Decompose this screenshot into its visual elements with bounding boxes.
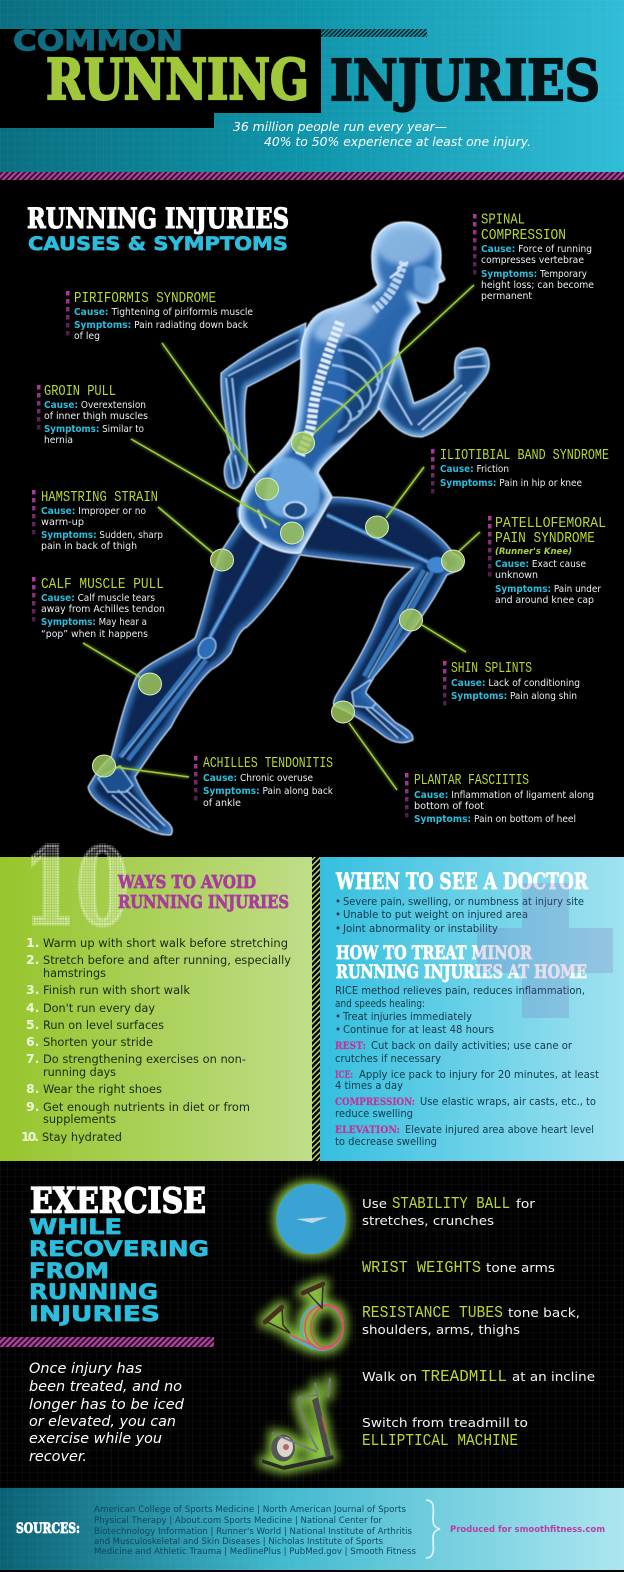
rear arm — [221, 323, 306, 489]
callout: plantar fasciitis: bottom of foot — [414, 801, 484, 812]
callout: hamstring strain: pain in back of thigh — [41, 541, 137, 552]
rear leg — [88, 500, 320, 835]
callout: spinal compression: SPINAL — [481, 212, 525, 228]
brace — [426, 1500, 440, 1558]
list of ten tips: Warm up with short walk before stretching — [43, 937, 288, 950]
RICE instructions: Treat injuries immediately — [342, 1012, 472, 1023]
doctor bullet list: Joint abnormality or instability — [342, 924, 498, 935]
text: elliptical machine: Switch from treadmill to — [362, 1415, 528, 1430]
list of ten tips: Do strengthening exercises on non- — [43, 1053, 246, 1066]
RICE instructions: ICE: — [335, 1070, 353, 1081]
paragraph: once injury has been treated: Once injury has — [29, 1361, 142, 1377]
heading: exercise: EXERCISE — [30, 1180, 206, 1222]
callout: patellofemoral pain syndrome: PAIN SYNDROME — [495, 531, 595, 547]
callout: plantar fasciitis: Symptoms: Pain on bottom of heel — [414, 814, 576, 825]
panel: ten ways to avoid running injuries — [0, 824, 312, 1161]
shoulder light — [310, 300, 380, 346]
text: wrist weights — [362, 1258, 555, 1277]
list of ten tips: 8. — [26, 1081, 39, 1096]
callout: patellofemoral pain syndrome: (Runner's Knee) — [495, 547, 572, 557]
RICE instructions: RICE method relieves pain, reduces inflammation, — [335, 986, 585, 997]
doctor bullet list — [335, 897, 584, 935]
source list: and Musculoskeletal and Skin Diseases | Nicholas Institute of Sports — [94, 1537, 384, 1547]
callout: shin splints: Cause: Lack of conditioning — [451, 678, 580, 689]
text: resistance tubes: shoulders, arms, thighs — [362, 1322, 520, 1337]
callout: groin pull: hernia — [44, 435, 73, 446]
subtitle — [233, 119, 531, 149]
text: elliptical machine — [362, 1415, 528, 1450]
heading: how to treat: HOW TO TREAT MINOR — [336, 943, 532, 964]
heading: running injuries causes and symptoms — [27, 202, 289, 255]
heading: while recovering from running injuries: FROM — [29, 1259, 109, 1284]
callout: plantar fasciitis: Cause: Inflammation of ligament along — [414, 790, 594, 801]
text: treadmill: at an incline — [512, 1369, 595, 1384]
callout: calf muscle pull: Symptoms: May hear a — [41, 617, 147, 628]
callout: spinal compression: permanent — [481, 291, 532, 302]
doctor bullet list: • — [335, 910, 341, 921]
list of ten tips: Wear the right shoes — [43, 1083, 162, 1096]
black title block — [0, 29, 321, 128]
callout: hamstring strain: Cause: Improper or no — [41, 506, 146, 517]
callout: hamstring strain: Symptoms: Sudden, sharp — [41, 530, 163, 541]
list of ten tips: Don't run every day — [43, 1002, 155, 1015]
text: stability ball: stretches, crunches — [362, 1213, 494, 1228]
list of ten tips: Finish run with short walk — [43, 984, 191, 997]
pointer lines to injury sites — [83, 285, 480, 790]
heading: ways to avoid: WAYS TO AVOID — [117, 872, 256, 893]
spine — [300, 322, 340, 455]
dark rib cavity — [330, 335, 380, 445]
heading: how to treat — [336, 943, 587, 983]
list of ten tips: 9. — [26, 1099, 39, 1114]
callout: piriformis syndrome: of leg — [74, 331, 100, 342]
list of ten tips: 4. — [26, 1000, 39, 1015]
label: sources: SOURCES: — [16, 1521, 80, 1537]
RICE instructions: crutches if necessary — [335, 1054, 441, 1065]
title: RUNNING: RUNNING — [46, 47, 309, 113]
RICE instructions: reduce swelling — [335, 1109, 413, 1120]
callout: shin splints: SHIN SPLINTS — [451, 661, 532, 677]
doctor bullet list: Unable to put weight on injured area — [343, 910, 528, 921]
panel: exercise while recovering — [0, 1161, 624, 1488]
produced by credit: Produced for smoothfitness.com — [450, 1525, 605, 1535]
text: resistance tubes — [362, 1303, 580, 1337]
text: treadmill: Walk on — [362, 1369, 417, 1384]
paragraph: once injury has been treated: or elevated, you can — [29, 1414, 176, 1430]
callout: patellofemoral pain syndrome: Cause: Exact cause — [495, 559, 586, 570]
callout: groin pull: Symptoms: Similar to — [44, 424, 144, 435]
RICE instructions: 4 times a day — [335, 1081, 403, 1092]
text: stability ball — [362, 1194, 536, 1228]
source list: Biotechnology Information | Runner's World | National Institute of Arthritis — [94, 1527, 413, 1537]
heading: running injuries causes and symptoms: RUNNING INJURIES — [27, 202, 289, 235]
illustration: x-ray runner — [88, 222, 489, 835]
callout: plantar fasciitis: PLANTAR FASCIITIS — [414, 773, 529, 789]
source list — [94, 1505, 417, 1557]
list of ten tips: 7. — [26, 1051, 39, 1066]
list of ten tips: 6. — [26, 1034, 39, 1049]
torso and head — [240, 222, 445, 553]
text: wrist weights: WRIST WEIGHTS — [362, 1258, 481, 1277]
skull and jaw — [376, 225, 434, 265]
RICE instructions: Cut back on daily activities; use cane or — [371, 1041, 573, 1052]
list of ten tips: 2. — [26, 952, 39, 967]
list of ten tips: Get enough nutrients in diet or from — [43, 1101, 250, 1114]
icon: stability ball — [276, 1184, 346, 1254]
callout: spinal compression: Symptoms: Temporary — [481, 269, 587, 280]
paragraph: once injury has been treated: longer has to be iced — [29, 1397, 184, 1413]
paragraph: once injury has been treated: exercise while you — [29, 1431, 162, 1447]
doctor bullet list: • — [335, 897, 341, 908]
subtitle: 40% to 50% experience at least one injury. — [264, 134, 531, 149]
callout: groin pull — [37, 384, 148, 446]
text: resistance tubes: RESISTANCE TUBES — [362, 1303, 503, 1322]
heading: while recovering from running injuries: RUNNING — [29, 1280, 158, 1305]
RICE instructions: and speeds healing: — [335, 999, 425, 1010]
callout: piriformis syndrome: PIRIFORMIS SYNDROME — [74, 291, 216, 307]
RICE instructions: to decrease swelling — [335, 1137, 437, 1148]
callout: spinal compression: compresses vertebrae — [481, 255, 584, 266]
callout: patellofemoral pain syndrome — [488, 516, 606, 606]
heading: while recovering from running injuries: WHILE — [29, 1215, 122, 1240]
callout: achilles tendonitis: Symptoms: Pain along back — [203, 786, 334, 797]
RICE instructions: • — [335, 1012, 341, 1023]
source list: Physical Therapy | About.com Sports Medicine | National Center for — [94, 1516, 382, 1526]
callout: iliotibial band syndrome — [431, 448, 609, 494]
callout: hamstring strain: warm-up — [41, 517, 84, 528]
RICE instructions — [335, 986, 599, 1148]
front arm — [378, 348, 489, 437]
heading: ways to avoid: RUNNING INJURIES — [118, 892, 289, 913]
callout: piriformis syndrome: Symptoms: Pain radiating down back — [74, 320, 249, 331]
icon: resistance tubes — [265, 1284, 347, 1352]
callout: patellofemoral pain syndrome: unknown — [495, 570, 538, 581]
RICE instructions: REST: — [335, 1041, 366, 1052]
list of ten tips: 10. — [21, 1129, 39, 1144]
list of ten tips: Shorten your stride — [43, 1036, 153, 1049]
heading: ways to avoid — [117, 872, 289, 913]
panel: when to see a doctor and treatment — [320, 857, 624, 1161]
source list: Medicine and Athletic Trauma | MedlinePlus | PubMed.gov | Smooth Fitness — [94, 1547, 417, 1557]
text: stability ball: Use — [362, 1196, 387, 1211]
text: treadmill: TREADMILL — [421, 1367, 507, 1386]
callout: calf muscle pull: Cause: Calf muscle tears — [41, 593, 155, 604]
watermark: medical plus — [477, 883, 613, 1018]
callout: piriformis syndrome — [66, 291, 253, 342]
RICE instructions: ELEVATION: — [335, 1125, 400, 1136]
callout: spinal compression — [473, 212, 594, 302]
RICE instructions: COMPRESSION: — [335, 1097, 415, 1108]
text: treadmill — [362, 1367, 595, 1386]
list of ten tips: supplements — [43, 1113, 116, 1126]
ribs — [322, 335, 382, 432]
callout: calf muscle pull — [32, 577, 165, 640]
text: stability ball: for — [516, 1196, 536, 1211]
divider: magenta hatch — [0, 172, 624, 180]
text: resistance tubes: tone back, — [508, 1305, 580, 1320]
heading: running injuries causes and symptoms: CAUSES & SYMPTOMS — [28, 233, 288, 255]
callout: patellofemoral pain syndrome: Symptoms: Pain under — [495, 584, 601, 595]
lead leg — [290, 497, 463, 743]
text: elliptical machine: ELLIPTICAL MACHINE — [362, 1431, 518, 1450]
RICE instructions: Continue for at least 48 hours — [343, 1025, 494, 1036]
callout: spinal compression: Cause: Force of running — [481, 244, 592, 255]
callout: spinal compression: COMPRESSION — [481, 228, 566, 244]
text: wrist weights: tone arms — [486, 1260, 555, 1275]
text: stability ball: STABILITY BALL — [392, 1194, 510, 1213]
title: COMMON: COMMON — [13, 25, 183, 57]
callout: spinal compression: height loss; can become — [481, 280, 594, 291]
divider: hatched column — [312, 857, 320, 1161]
list of ten tips: hamstrings — [43, 967, 106, 980]
list of ten tips: Stretch before and after running, especially — [43, 954, 291, 967]
source list: American College of Sports Medicine | North American Journal of Sports — [94, 1505, 407, 1515]
callout: calf muscle pull: away from Achilles tendon — [41, 604, 165, 615]
heading: while recovering from running injuries: RECOVERING — [29, 1237, 209, 1262]
callout: hamstring strain — [32, 490, 163, 552]
list of ten tips: running days — [43, 1066, 116, 1079]
paragraph: once injury has been treated: been treated, and no — [29, 1379, 182, 1395]
callout: groin pull: GROIN PULL — [44, 384, 116, 400]
heading: while recovering from running injuries — [29, 1215, 209, 1327]
panel: sources footer — [0, 1488, 624, 1570]
callout: patellofemoral pain syndrome: PATELLOFEMORAL — [495, 516, 606, 532]
list of ten tips: 3. — [26, 982, 39, 997]
subtitle: 36 million people run every year— — [233, 119, 447, 134]
callout: iliotibial band syndrome: Symptoms: Pain in hip or knee — [440, 478, 582, 489]
panel: header banner — [0, 0, 624, 172]
RICE instructions: Apply ice pack to injury for 20 minutes, at least — [359, 1070, 599, 1081]
list of ten tips: 1. — [26, 935, 39, 950]
callout: achilles tendonitis: Cause: Chronic overuse — [203, 773, 313, 784]
doctor bullet list: Severe pain, swelling, or numbness at injury site — [343, 897, 584, 908]
callout: achilles tendonitis: of ankle — [203, 798, 241, 809]
neck bones — [374, 262, 404, 310]
callout: patellofemoral pain syndrome: and around knee cap — [495, 595, 594, 606]
callout: hamstring strain: HAMSTRING STRAIN — [41, 490, 158, 506]
callout: achilles tendonitis: ACHILLES TENDONITIS — [203, 756, 333, 772]
list of ten tips — [21, 935, 291, 1144]
callout: plantar fasciitis — [405, 773, 594, 825]
callout: calf muscle pull: CALF MUSCLE PULL — [41, 577, 164, 593]
list of ten tips: Run on level surfaces — [43, 1019, 164, 1032]
pelvis — [265, 457, 320, 519]
watermark: halftone number 10: 10 — [23, 824, 129, 949]
paragraph: once injury has been treated: recover. — [29, 1449, 87, 1465]
icon: elliptical machine — [262, 1378, 334, 1470]
callout: groin pull: Cause: Overextension — [44, 400, 146, 411]
hatch accent — [0, 1337, 214, 1347]
callout: achilles tendonitis — [194, 756, 334, 809]
injury site markers — [92, 432, 464, 777]
callout: shin splints — [443, 661, 580, 706]
callout: piriformis syndrome: Cause: Tightening of piriformis muscle — [74, 307, 253, 318]
RICE instructions: Elevate injured area above heart level — [405, 1125, 594, 1136]
paragraph: once injury has been treated — [29, 1361, 184, 1465]
small hatch accent — [321, 29, 427, 37]
doctor bullet list: • — [335, 924, 341, 935]
heading: while recovering from running injuries: INJURIES — [29, 1302, 160, 1327]
list of ten tips: Stay hydrated — [42, 1131, 122, 1144]
callout: groin pull: of inner thigh muscles — [44, 411, 148, 422]
callout: iliotibial band syndrome: Cause: Friction — [440, 464, 509, 475]
RICE instructions: Use elastic wraps, air casts, etc., to — [420, 1097, 596, 1108]
callout: calf muscle pull: “pop” when it happens — [41, 629, 148, 640]
callout: shin splints: Symptoms: Pain along shin — [451, 691, 577, 702]
RICE instructions: • — [335, 1025, 341, 1036]
list of ten tips: 5. — [26, 1017, 39, 1032]
